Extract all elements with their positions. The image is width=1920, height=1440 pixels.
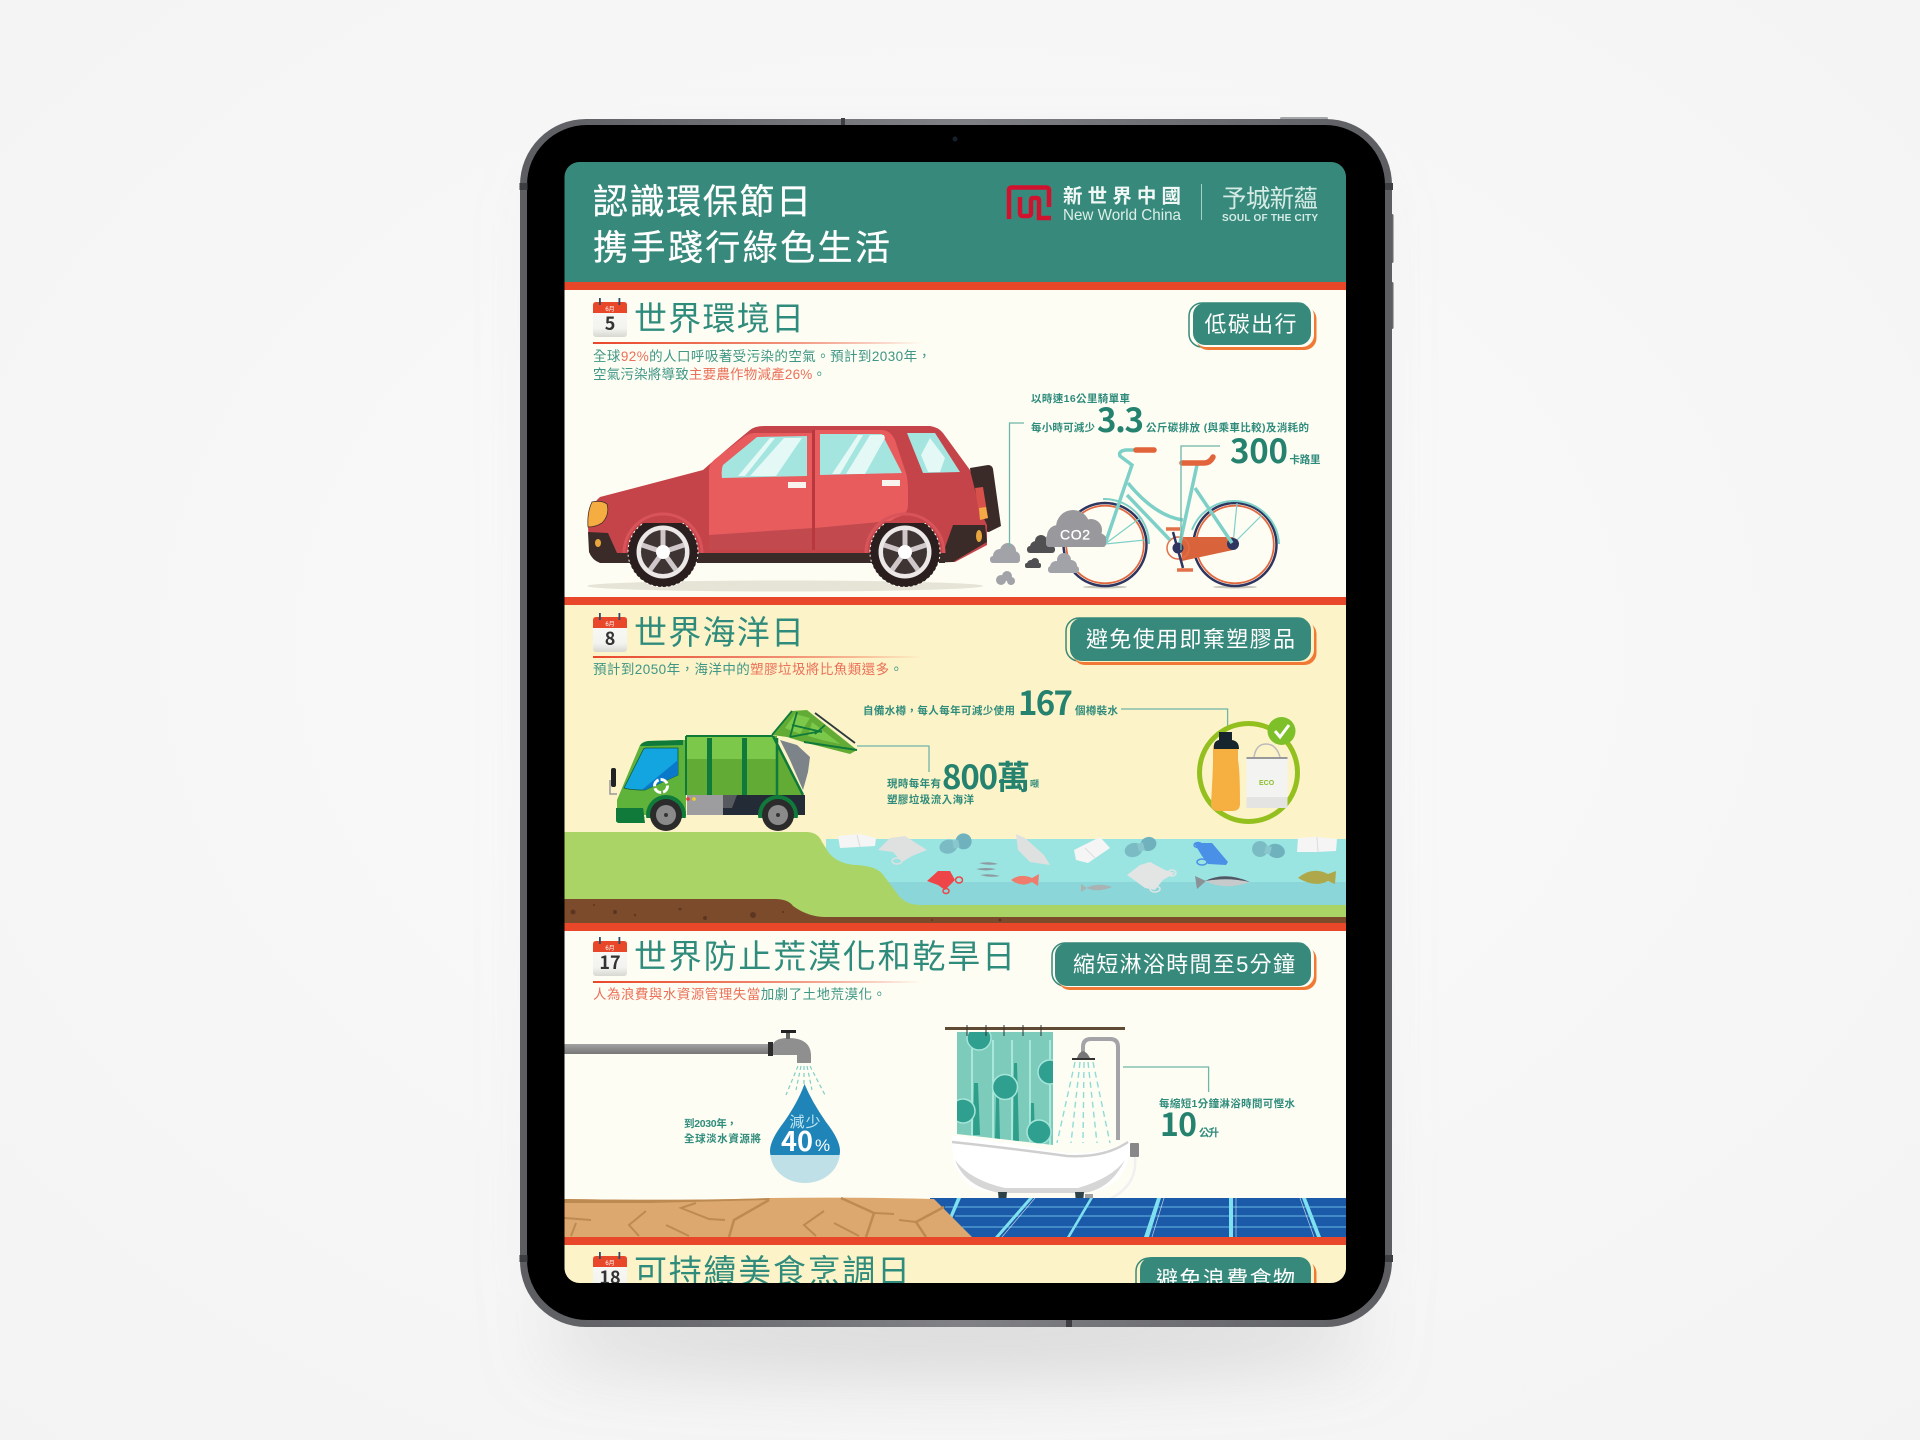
CO2 cloud: CO2	[1060, 526, 1090, 542]
logo divider and Soul of the City: 予城新蘊	[1222, 185, 1318, 213]
heading underline	[593, 981, 923, 983]
heading underline	[593, 342, 923, 344]
garbage truck illustration	[610, 710, 857, 835]
device shadow	[536, 160, 1376, 1371]
annotation: 8 million tonnes	[857, 746, 1039, 806]
badge: shorten shower time	[1052, 943, 1316, 990]
calendar icon: June 17: 17	[599, 949, 621, 975]
annotation: freshwater reduction	[684, 1117, 762, 1145]
badge: avoid wasting food: 避免浪費食物	[1156, 1267, 1295, 1292]
landscape: shore and ocean	[564, 832, 1347, 923]
front wheel	[628, 517, 698, 587]
calendar icon: June 8	[593, 613, 627, 652]
heading: World Oceans Day: 世界海洋日	[634, 614, 804, 651]
annotation: shower water saving: 10	[1160, 1100, 1197, 1146]
badge: shorten shower time: 縮短淋浴時間至5分鐘	[1073, 952, 1295, 977]
annotation: shower water saving: 公升	[1199, 1126, 1220, 1139]
fact text: air pollution: 空氣污染將導致主要農作物減產26%。	[593, 366, 826, 382]
water drop: 40 percent: 40	[781, 1120, 813, 1159]
heading: Sustainable Gastronomy Day: 可持續美食烹調日	[634, 1253, 910, 1290]
annotation: freshwater reduction: 全球淡水資源將	[684, 1132, 762, 1145]
section band: World Environment Day	[564, 282, 1347, 597]
annotation: 167 bottles: 個樽裝水	[1075, 704, 1118, 717]
bath and shower illustration	[945, 1025, 1139, 1213]
tablet device frame	[520, 117, 1394, 1327]
annotation: shower water saving	[1123, 1067, 1296, 1146]
fact text: land desertification: 人為浪費與水資源管理失當加劇了土地荒漠化。	[593, 986, 886, 1002]
rear wheel	[870, 517, 940, 587]
annotation: 8 million tonnes: 塑膠垃圾流入海洋	[887, 793, 974, 806]
annotation: 167 bottles: 167	[1018, 677, 1073, 725]
fact text: air pollution: 全球92%的人口呼吸著受污染的空氣。預計到2030年，	[593, 349, 931, 364]
annotation: cycling saves carbon: 以時速16公里騎單車	[1031, 392, 1130, 405]
header title: 認識環保節日	[593, 183, 811, 222]
fact text: air pollution	[593, 349, 931, 382]
badge: avoid disposable plastics: 避免使用即棄塑膠品	[1086, 627, 1295, 652]
ground: cracked earth and blue tile floor	[564, 1198, 1347, 1237]
section band: World Oceans Day	[564, 597, 1346, 848]
exhaust clouds	[990, 510, 1106, 585]
badge: avoid disposable plastics	[1066, 618, 1316, 665]
calendar icon: June 18	[593, 1252, 627, 1291]
icon: reusable bottle and eco bag	[1200, 717, 1298, 822]
annotation: 300 calories: 卡路里	[1290, 453, 1320, 466]
annotation: 300 calories	[1180, 438, 1320, 550]
annotation: cycling saves carbon: 公斤碳排放 (與乘車比較)及消耗的	[1146, 421, 1309, 434]
header title: 携手踐行綠色生活	[593, 229, 890, 268]
calendar icon: June 18: 18	[599, 1264, 621, 1290]
annotation: cycling saves carbon: 3.3	[1097, 394, 1144, 442]
annotation: cycling saves carbon	[1010, 392, 1309, 547]
logo: New World China: 新世界中國	[1063, 184, 1181, 208]
calendar icon: June 5	[593, 298, 627, 337]
annotation: 300 calories: 300	[1230, 425, 1288, 473]
annotation: 8 million tonnes: 現時每年有	[887, 777, 941, 790]
heading: World Environment Day: 世界環境日	[634, 300, 804, 337]
calendar icon: June 8: 6月	[605, 621, 615, 628]
badge: low carbon travel: 低碳出行	[1204, 312, 1296, 337]
recycling symbol	[654, 780, 668, 792]
annotation: cycling saves carbon: 每小時可減少	[1031, 421, 1096, 434]
water drop: 40 percent: %	[815, 1136, 830, 1155]
annotation: 8 million tonnes: 噸	[1030, 778, 1039, 789]
badge: avoid wasting food	[1136, 1257, 1316, 1304]
section band: Sustainable Gastronomy Day	[564, 1237, 1347, 1285]
badge: low carbon travel	[1189, 303, 1316, 350]
calendar icon: June 5: 6月	[605, 306, 615, 313]
logo: New World China: New World China	[1063, 207, 1181, 224]
logo divider and Soul of the City: SOUL OF THE CITY	[1222, 213, 1318, 224]
calendar icon: June 17: 6月	[605, 945, 615, 952]
heading: World Day to Combat Desertification and Drought: 世界防止荒漠化和乾旱日	[634, 938, 1015, 975]
ocean plastic and fish	[838, 832, 1337, 894]
check mark badge	[1268, 717, 1296, 745]
annotation: 8 million tonnes: 800萬	[942, 751, 1030, 799]
logo divider and Soul of the City	[1201, 184, 1318, 224]
annotation: 167 bottles	[863, 677, 1228, 728]
fact text: ocean plastic: 預計到2050年，海洋中的塑膠垃圾將比魚類還多。	[593, 661, 903, 677]
annotation: freshwater reduction: 到2030年，	[684, 1117, 737, 1130]
heading underline	[593, 656, 923, 658]
car illustration	[587, 426, 1001, 592]
water drop: 40 percent: 減少	[790, 1114, 820, 1131]
calendar icon: June 5: 5	[605, 310, 615, 336]
logo: New World China	[1009, 184, 1181, 224]
annotation: shower water saving: 每縮短1分鐘淋浴時間可慳水	[1159, 1097, 1296, 1110]
header title	[593, 183, 890, 268]
header band	[564, 162, 1347, 282]
screen content	[564, 162, 1347, 1304]
water drop: 40 percent	[770, 1084, 840, 1183]
calendar icon: June 18: 6月	[605, 1260, 615, 1267]
section band: Desertification and Drought Day	[564, 923, 1347, 1237]
annotation: 167 bottles: 自備水樽，每人每年可減少使用	[863, 704, 1015, 717]
bicycle illustration	[1064, 450, 1279, 588]
icon: reusable bottle and eco bag: ECO	[1259, 780, 1275, 787]
calendar icon: June 17	[593, 937, 627, 976]
calendar icon: June 8: 8	[605, 625, 615, 651]
tap and pipe illustration	[564, 1030, 825, 1095]
